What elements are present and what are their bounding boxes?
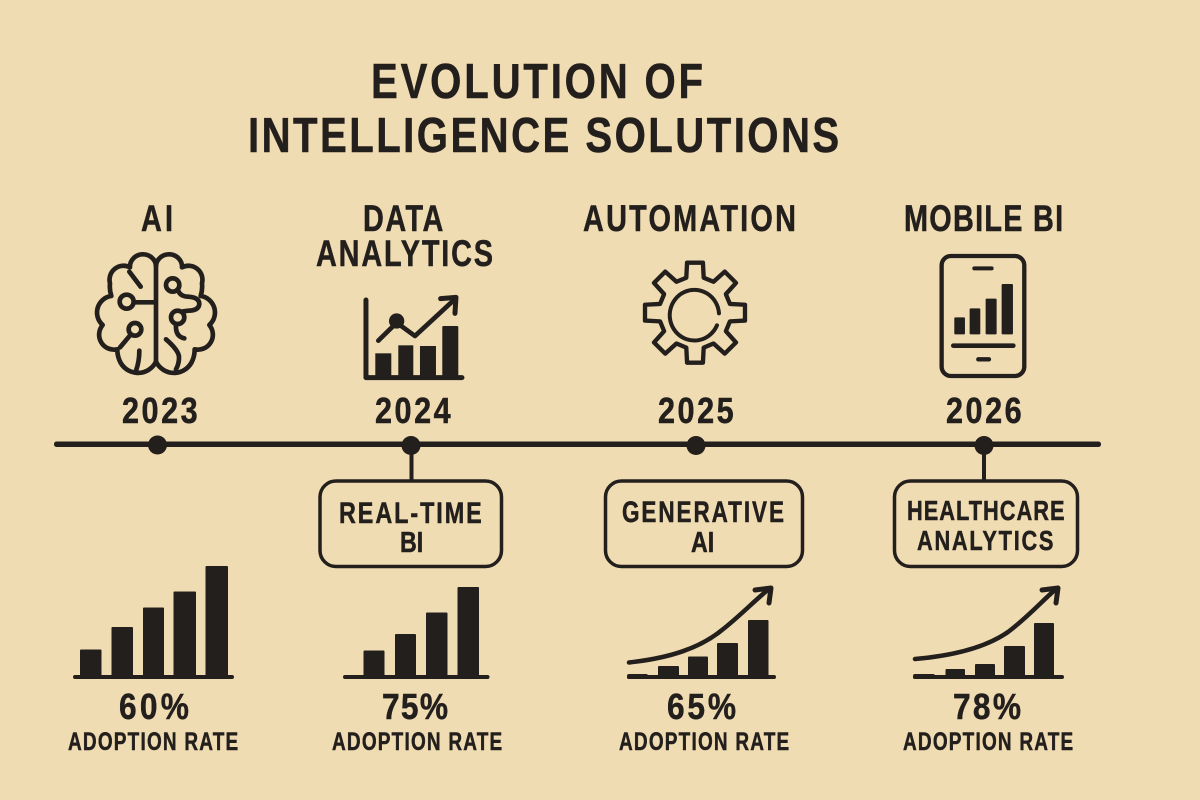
callout: Real-Time BI: BI xyxy=(400,525,423,559)
stat: 75% adoption rate: ADOPTION RATE xyxy=(332,727,502,756)
callout: Generative AI: AI xyxy=(691,525,714,559)
year: 2023: 2023 xyxy=(122,392,198,432)
stat: 78% adoption rate: ADOPTION RATE xyxy=(903,727,1073,756)
icon: gear xyxy=(645,263,745,363)
stat: 75% adoption rate: 75% xyxy=(382,687,448,727)
heading: Mobile BI: MOBILE BI xyxy=(904,199,1063,240)
callout: Healthcare Analytics: ANALYTICS xyxy=(917,525,1053,557)
stat: 75% adoption rate xyxy=(332,687,502,756)
stat: 60% adoption rate: 60% xyxy=(119,687,189,727)
title: INTELLIGENCE SOLUTIONS xyxy=(248,108,839,163)
heading: Automation: AUTOMATION xyxy=(583,199,796,240)
callout: Generative AI: GENERATIVE xyxy=(622,495,784,529)
title xyxy=(248,54,839,163)
stat: 78% adoption rate xyxy=(903,687,1073,756)
bar chart: AI adoption xyxy=(73,566,234,679)
heading: Data Analytics xyxy=(316,199,493,275)
stat: 65% adoption rate: ADOPTION RATE xyxy=(619,727,789,756)
callout: Real-Time BI xyxy=(320,481,502,566)
callout: Generative AI xyxy=(606,481,802,566)
icon: data analytics chart xyxy=(366,297,462,378)
year: 2026: 2026 xyxy=(946,392,1022,432)
icon: mobile phone xyxy=(942,256,1024,376)
heading: Data Analytics: ANALYTICS xyxy=(316,234,493,275)
stat: 60% adoption rate: ADOPTION RATE xyxy=(68,727,238,756)
callout: Healthcare Analytics: HEALTHCARE xyxy=(907,495,1065,527)
bar chart with growth arrow: Automation adoption xyxy=(627,588,776,679)
callout: Healthcare Analytics xyxy=(894,481,1078,566)
bar chart with growth arrow: Mobile BI adoption xyxy=(913,588,1064,679)
year: 2025: 2025 xyxy=(658,392,734,432)
callout: Real-Time BI: REAL-TIME xyxy=(339,496,482,530)
stat: 65% adoption rate xyxy=(619,687,789,756)
timeline axis with milestones xyxy=(54,436,1101,482)
stat: 60% adoption rate xyxy=(68,687,238,756)
stat: 78% adoption rate: 78% xyxy=(953,687,1021,727)
title: EVOLUTION OF xyxy=(371,54,703,109)
heading: AI: AI xyxy=(141,199,173,240)
heading: Data Analytics: DATA xyxy=(363,199,443,240)
bar chart: Data Analytics adoption xyxy=(343,587,490,679)
year: 2024: 2024 xyxy=(375,392,451,432)
icon: brain xyxy=(97,254,215,373)
stat: 65% adoption rate: 65% xyxy=(667,687,736,727)
